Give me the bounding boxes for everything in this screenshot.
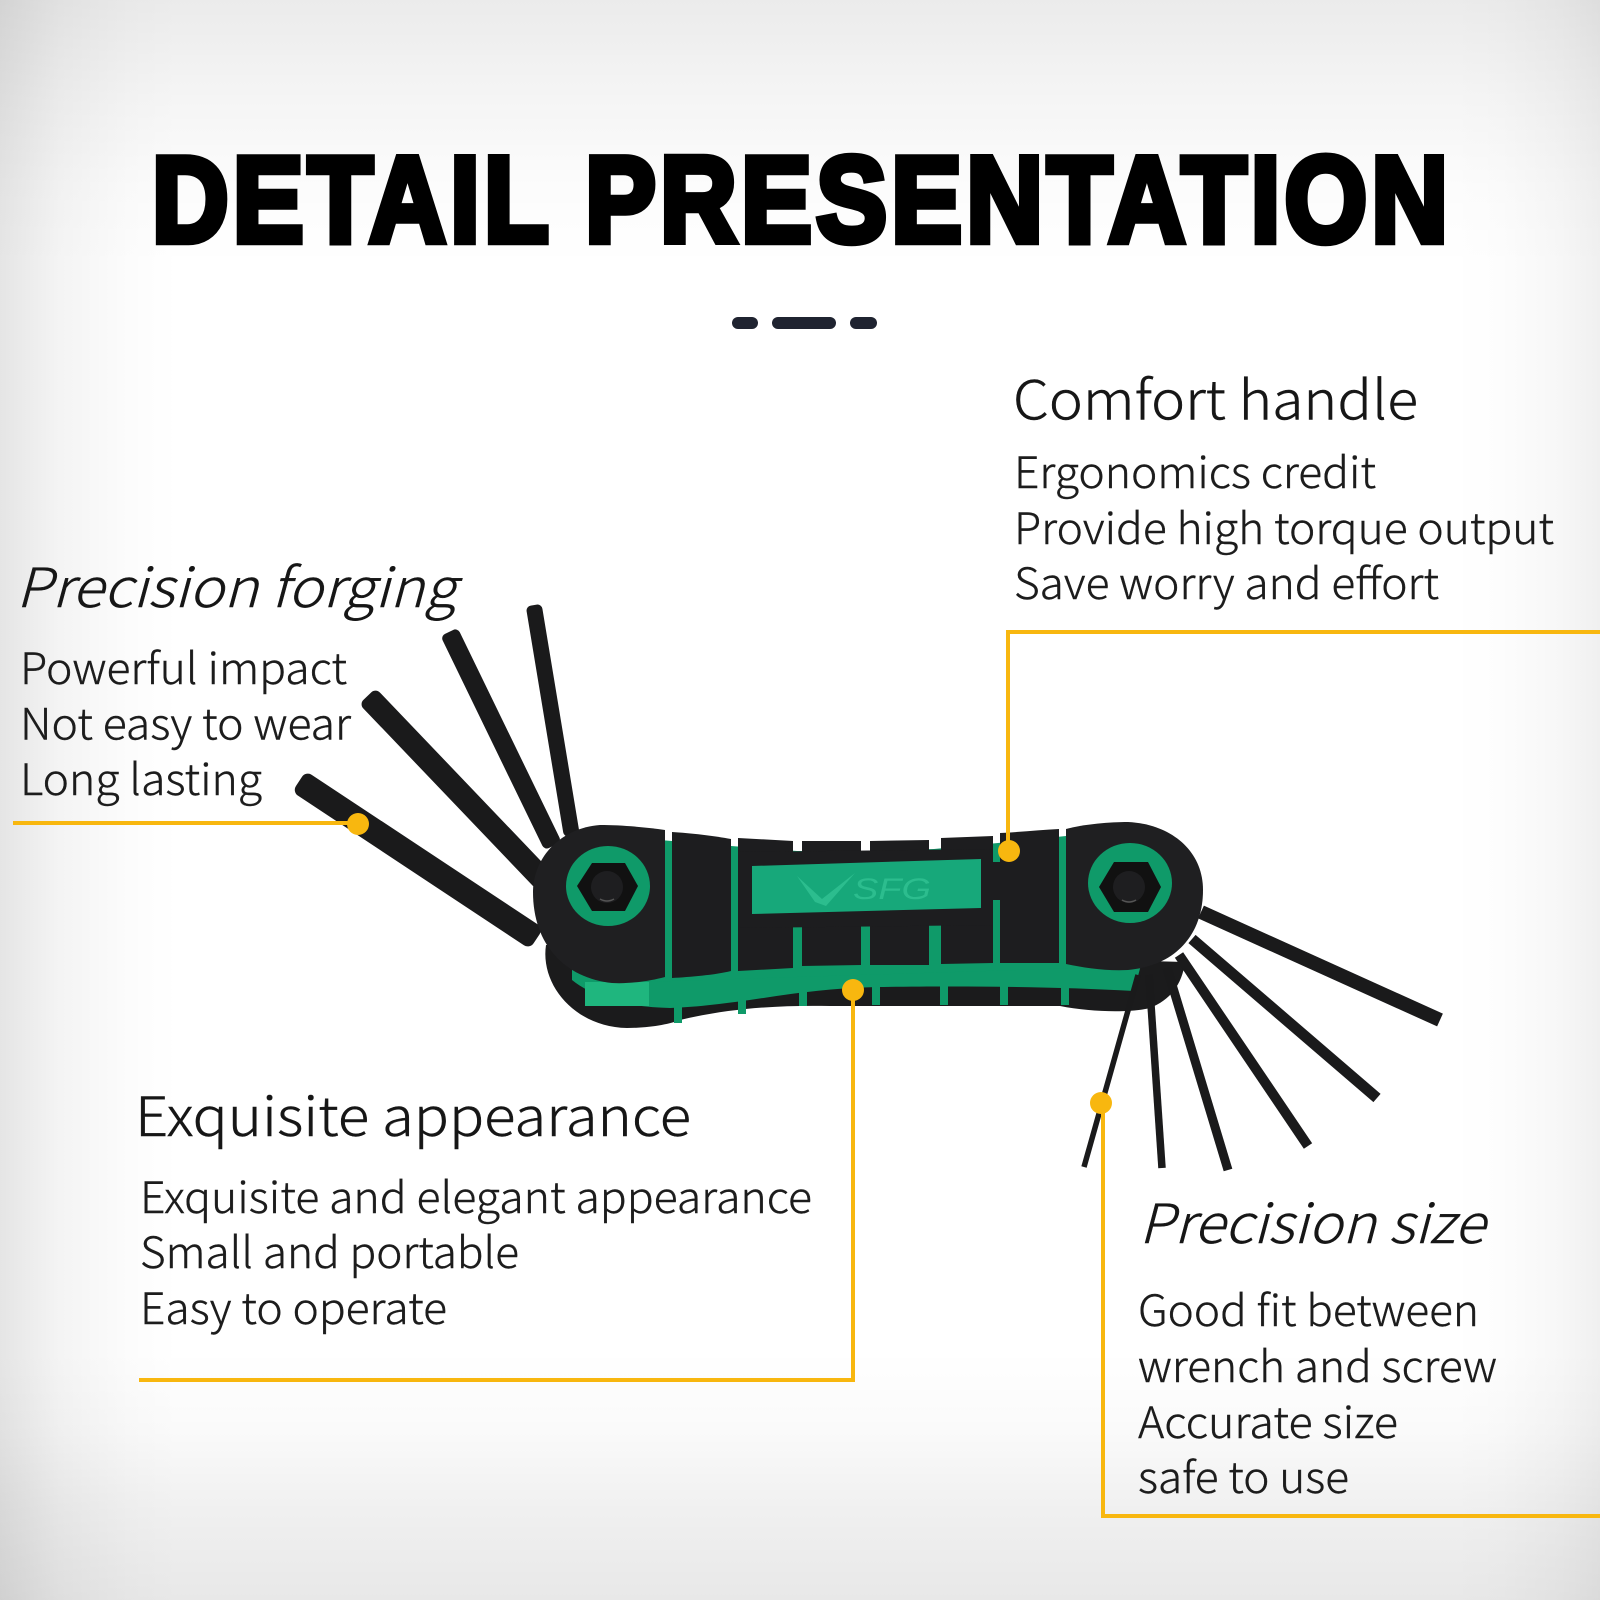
callout: comfort handle: Save worry and effort — [1014, 550, 1439, 612]
left socket — [566, 846, 650, 926]
green inner band — [572, 950, 1145, 1008]
callout: exquisite appearance: Exquisite and elegant appearance — [140, 1164, 812, 1226]
right socket — [1088, 843, 1172, 923]
left end cap — [533, 825, 665, 983]
callout: precision size: Accurate size — [1138, 1389, 1398, 1451]
brand label plate — [752, 859, 981, 914]
callout: precision forging: Long lasting — [20, 746, 262, 808]
folding tool body — [533, 822, 1203, 1028]
callout: comfort handle: Comfort handle — [1013, 356, 1418, 436]
callout: exquisite appearance: Exquisite appearance — [135, 1073, 691, 1152]
callout: precision forging: Powerful impact — [20, 635, 347, 697]
callout: precision size — [1090, 1092, 1600, 1516]
hex keys: right fan — [1084, 912, 1440, 1170]
callout: precision size: Precision size — [1139, 1180, 1489, 1259]
title: DETAIL PRESENTATION — [152, 133, 1448, 268]
callout: precision forging — [13, 544, 463, 835]
callout: exquisite appearance — [135, 979, 864, 1380]
callout: exquisite appearance: Small and portable — [140, 1219, 519, 1281]
rear green slits — [674, 985, 1069, 1023]
callout: comfort handle: Provide high torque output — [1014, 495, 1554, 557]
callout: precision size: safe to use — [1138, 1444, 1349, 1506]
callout: precision forging: Not easy to wear — [20, 690, 352, 752]
callout: precision size: Good fit between — [1138, 1277, 1479, 1339]
hex keys: left fan — [292, 604, 580, 949]
callout: comfort handle: Ergonomics credit — [1014, 439, 1376, 501]
callout: precision forging: Precision forging — [16, 544, 463, 623]
logo text: SFG — [853, 873, 931, 906]
callout: precision size: wrench and screw — [1138, 1333, 1497, 1395]
title divider dashes — [732, 317, 877, 329]
callout: exquisite appearance: Easy to operate — [140, 1275, 447, 1337]
callout: comfort handle — [998, 356, 1600, 862]
bright green clip — [585, 982, 649, 1006]
green core — [640, 836, 1080, 982]
logo wing — [797, 873, 855, 906]
rear black shell — [545, 945, 1185, 1028]
handle grip segments — [672, 829, 1059, 978]
right end cap — [1066, 822, 1203, 970]
